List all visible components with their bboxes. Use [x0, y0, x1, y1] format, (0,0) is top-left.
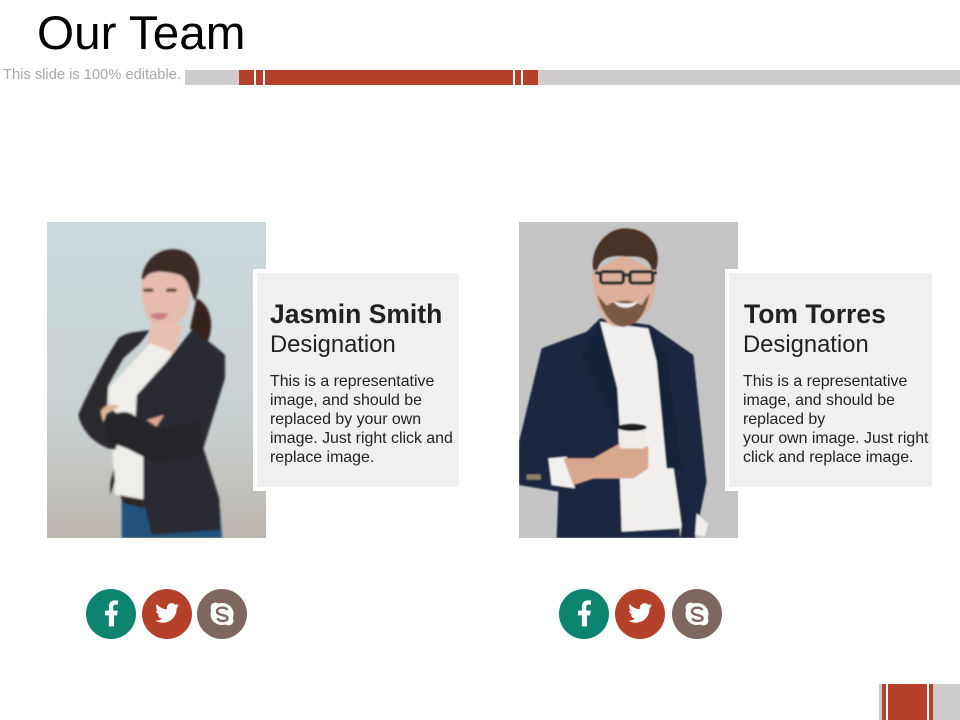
description: This is a representative: [270, 373, 434, 390]
designation: Designation: [270, 331, 396, 358]
description: replace image.: [270, 449, 374, 466]
name: Jasmin Smith: [270, 299, 442, 329]
designation: Designation: [743, 331, 869, 358]
photo: Tom Torres: [519, 222, 738, 538]
title: Our Team: [37, 7, 246, 60]
description: replaced by: [743, 411, 825, 428]
description: image, and should be: [270, 392, 422, 409]
photo: Jasmin Smith: [47, 222, 266, 538]
subtitle note: This slide is 100% editable.: [3, 67, 181, 83]
icon: facebook: [559, 589, 609, 639]
header bar: [185, 70, 960, 85]
description: This is a representative: [743, 373, 907, 390]
card panel: [257, 273, 459, 487]
name: Tom Torres: [744, 299, 886, 329]
card panel: [729, 273, 932, 487]
description: [270, 373, 453, 466]
description: replaced by your own: [270, 411, 421, 428]
icon: twitter: [615, 589, 665, 639]
icon: skype: [672, 589, 722, 639]
icon: skype: [197, 589, 247, 639]
footer accent: [879, 684, 960, 720]
icon: twitter: [142, 589, 192, 639]
icon: facebook: [86, 589, 136, 639]
social icons: Jasmin Smith: [86, 589, 247, 639]
info card: Tom Torres: [725, 269, 932, 491]
description: your own image. Just right: [743, 430, 928, 447]
info card: Jasmin Smith: [253, 269, 459, 491]
description: click and replace image.: [743, 449, 913, 466]
description: image, and should be: [743, 392, 895, 409]
description: image. Just right click and: [270, 430, 453, 447]
social icons: Tom Torres: [559, 589, 722, 639]
description: [743, 373, 928, 466]
